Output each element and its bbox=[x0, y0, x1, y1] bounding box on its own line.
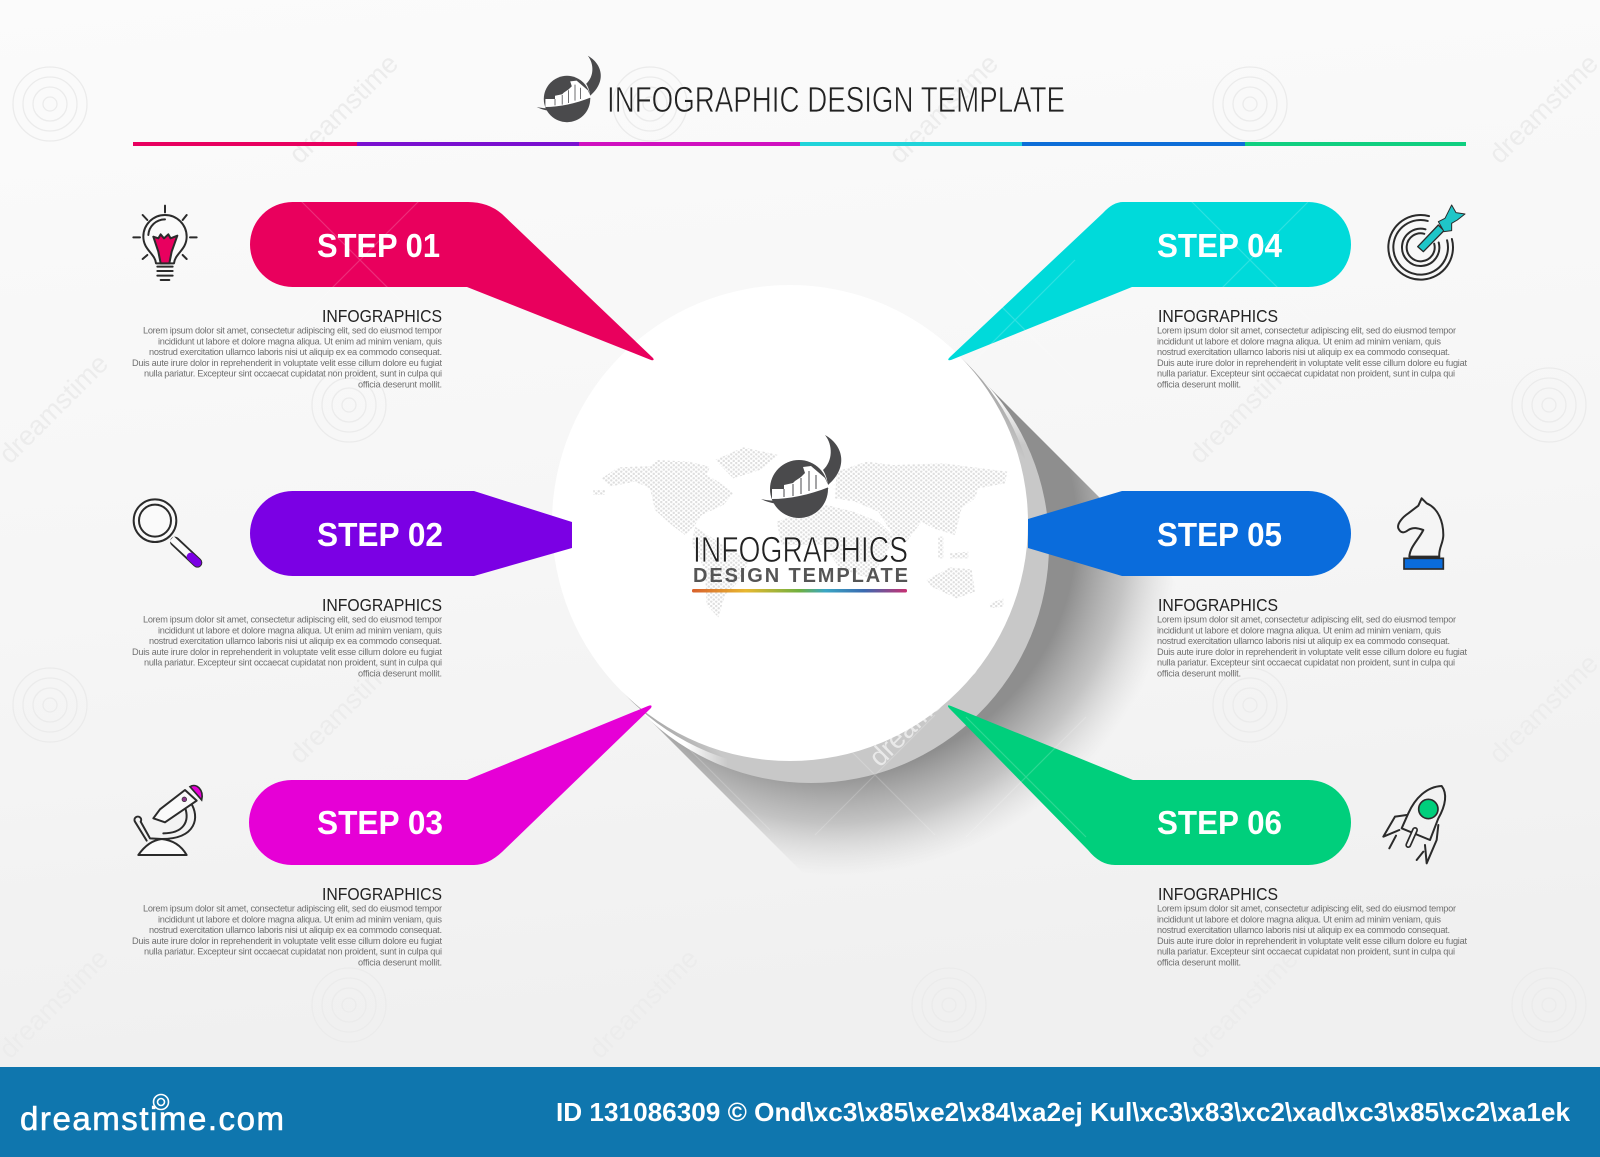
step 06 body text: Duis aute irure dolor in reprehenderit in voluptate velit esse cillum dolore eu fugiat bbox=[1157, 936, 1467, 946]
step 01 body text bbox=[132, 326, 442, 390]
icon: light bulb bbox=[133, 206, 197, 280]
panel: step 06 bbox=[948, 705, 1467, 968]
step 06 body text: nulla pariatur. Excepteur sint occaecat cupidatat non proident, sunt in culpa qui bbox=[1157, 947, 1455, 957]
watermark: spirals and diagonal text: dreamstime bbox=[583, 943, 704, 1064]
step 04 body text: nulla pariatur. Excepteur sint occaecat cupidatat non proident, sunt in culpa qui bbox=[1157, 369, 1455, 379]
step 06 heading: INFOGRAPHICS bbox=[1158, 884, 1278, 904]
step 02 body text: officia deserunt mollit. bbox=[358, 668, 442, 678]
step 03 heading: INFOGRAPHICS bbox=[322, 884, 442, 904]
step 05 heading: INFOGRAPHICS bbox=[1158, 595, 1278, 615]
step 04 body text: Lorem ipsum dolor sit amet, consectetur adipiscing elit, sed do eiusmod tempor bbox=[1157, 326, 1456, 336]
step 02 body text: Lorem ipsum dolor sit amet, consectetur adipiscing elit, sed do eiusmod tempor bbox=[143, 614, 442, 624]
step 04 heading: INFOGRAPHICS bbox=[1158, 306, 1278, 326]
step 01 body text: nulla pariatur. Excepteur sint occaecat cupidatat non proident, sunt in culpa qui bbox=[144, 369, 442, 379]
panel: step 01 bbox=[132, 202, 654, 390]
icon: magnifying glass bbox=[134, 499, 197, 563]
step 05 body text: officia deserunt mollit. bbox=[1157, 668, 1241, 678]
watermark text across the disc: dreamstime bbox=[863, 651, 984, 772]
watermark: spirals and diagonal text: dreamstime bbox=[283, 648, 404, 769]
step 01 body text: Lorem ipsum dolor sit amet, consectetur adipiscing elit, sed do eiusmod tempor bbox=[143, 326, 442, 336]
watermark: spirals and diagonal text: dreamstime bbox=[883, 48, 1004, 169]
step 06 body text: Lorem ipsum dolor sit amet, consectetur adipiscing elit, sed do eiusmod tempor bbox=[1157, 904, 1456, 914]
step 01 label: STEP 01 bbox=[317, 227, 440, 264]
step 01 body text: officia deserunt mollit. bbox=[358, 380, 442, 390]
header title: INFOGRAPHIC DESIGN TEMPLATE bbox=[607, 79, 1065, 120]
footer brand: dreamstime.com bbox=[20, 1100, 284, 1137]
step 04 body text bbox=[1157, 326, 1467, 390]
central white disc bbox=[552, 285, 1028, 761]
step 03 body text: Lorem ipsum dolor sit amet, consectetur adipiscing elit, sed do eiusmod tempor bbox=[143, 904, 442, 914]
step 06 body text bbox=[1157, 904, 1467, 968]
step 06 body text: incididunt ut labore et dolore magna aliqua. Ut enim ad minim veniam, quis bbox=[1157, 914, 1441, 924]
arrow pill 02 bbox=[250, 491, 572, 576]
step 03 body text: incididunt ut labore et dolore magna aliqua. Ut enim ad minim veniam, quis bbox=[158, 914, 442, 924]
arrow pill 06 bbox=[948, 705, 1351, 865]
step 04 body text: nostrud exercitation ullamco laboris nisi ut aliquip ex ea commodo consequat. bbox=[1157, 347, 1450, 357]
step 05 body text: nulla pariatur. Excepteur sint occaecat cupidatat non proident, sunt in culpa qui bbox=[1157, 658, 1455, 668]
arrow pill 05 bbox=[1028, 491, 1351, 576]
watermark: spirals and diagonal text: dreamstime bbox=[1183, 348, 1304, 469]
step 06 body text: officia deserunt mollit. bbox=[1157, 958, 1241, 968]
icon: rocket bbox=[1383, 786, 1445, 863]
header rainbow divider bbox=[133, 142, 1466, 146]
arrow pill 03 bbox=[249, 705, 652, 865]
central rainbow underline bbox=[692, 589, 907, 592]
step 03 body text bbox=[132, 904, 442, 968]
panel: step 04 bbox=[948, 202, 1467, 390]
step 01 body text: nostrud exercitation ullamco laboris nisi ut aliquip ex ea commodo consequat. bbox=[149, 347, 442, 357]
step 02 heading: INFOGRAPHICS bbox=[322, 595, 442, 615]
step 04 label: STEP 04 bbox=[1157, 227, 1283, 264]
watermark: spirals and diagonal text: dreamstime bbox=[283, 48, 404, 169]
icon: chess knight bbox=[1398, 498, 1443, 569]
step 02 body text: incididunt ut labore et dolore magna aliqua. Ut enim ad minim veniam, quis bbox=[158, 625, 442, 635]
central logo bbox=[761, 435, 841, 518]
step 05 body text: Lorem ipsum dolor sit amet, consectetur adipiscing elit, sed do eiusmod tempor bbox=[1157, 614, 1456, 624]
icon: target with arrow bbox=[1388, 205, 1465, 280]
watermark: spirals and diagonal text: dreamstime bbox=[1183, 943, 1304, 1064]
central subtitle: DESIGN TEMPLATE bbox=[693, 565, 908, 587]
step 04 body text: incididunt ut labore et dolore magna aliqua. Ut enim ad minim veniam, quis bbox=[1157, 336, 1441, 346]
step 02 body text: nostrud exercitation ullamco laboris nisi ut aliquip ex ea commodo consequat. bbox=[149, 636, 442, 646]
back disc bbox=[625, 358, 1049, 783]
central title: INFOGRAPHICS bbox=[693, 529, 908, 570]
step 01 body text: incididunt ut labore et dolore magna aliqua. Ut enim ad minim veniam, quis bbox=[158, 336, 442, 346]
step 05 body text: incididunt ut labore et dolore magna aliqua. Ut enim ad minim veniam, quis bbox=[1157, 625, 1441, 635]
panel: step 02 bbox=[132, 491, 572, 678]
step 03 body text: Duis aute irure dolor in reprehenderit in voluptate velit esse cillum dolore eu fugiat bbox=[132, 936, 442, 946]
arrow pill 04 bbox=[948, 202, 1351, 360]
step 06 label: STEP 06 bbox=[1157, 804, 1282, 841]
footer bar bbox=[0, 1067, 1600, 1157]
step 05 body text: nostrud exercitation ullamco laboris nisi ut aliquip ex ea commodo consequat. bbox=[1157, 636, 1450, 646]
header logo bbox=[537, 56, 601, 122]
panel: step 05 bbox=[1028, 491, 1467, 678]
step 02 body text: nulla pariatur. Excepteur sint occaecat cupidatat non proident, sunt in culpa qui bbox=[144, 658, 442, 668]
step 02 body text: Duis aute irure dolor in reprehenderit in voluptate velit esse cillum dolore eu fugiat bbox=[132, 647, 442, 657]
footer credit: ID 131086309 © Ond\xc3\x85\xe2\x84\xa2ej Kul\xc3\x83\xc2\xad\xc3\x85\xc2\xa1ek bbox=[556, 1097, 1571, 1127]
step 01 body text: Duis aute irure dolor in reprehenderit in voluptate velit esse cillum dolore eu fugiat bbox=[132, 358, 442, 368]
dotted world map bbox=[593, 447, 1007, 617]
watermark: white cross lines over shapes bbox=[300, 200, 1310, 837]
step 05 label: STEP 05 bbox=[1157, 516, 1282, 553]
panel: step 03 bbox=[132, 705, 652, 968]
step 02 body text bbox=[132, 614, 442, 678]
step 03 body text: nostrud exercitation ullamco laboris nisi ut aliquip ex ea commodo consequat. bbox=[149, 925, 442, 935]
step 04 body text: Duis aute irure dolor in reprehenderit in voluptate velit esse cillum dolore eu fugiat bbox=[1157, 358, 1467, 368]
icon: microscope bbox=[134, 786, 202, 855]
step 03 label: STEP 03 bbox=[317, 804, 443, 841]
arrow pill 01 bbox=[250, 202, 654, 360]
step 03 body text: officia deserunt mollit. bbox=[358, 958, 442, 968]
footer spiral icon bbox=[154, 1094, 168, 1110]
step 04 body text: officia deserunt mollit. bbox=[1157, 380, 1241, 390]
step 03 body text: nulla pariatur. Excepteur sint occaecat cupidatat non proident, sunt in culpa qui bbox=[144, 947, 442, 957]
step 06 body text: nostrud exercitation ullamco laboris nisi ut aliquip ex ea commodo consequat. bbox=[1157, 925, 1450, 935]
long shadow of the central disc bbox=[643, 377, 1209, 943]
step 02 label: STEP 02 bbox=[317, 516, 443, 553]
step 05 body text bbox=[1157, 614, 1467, 678]
step 01 heading: INFOGRAPHICS bbox=[322, 306, 442, 326]
step 05 body text: Duis aute irure dolor in reprehenderit in voluptate velit esse cillum dolore eu fugiat bbox=[1157, 647, 1467, 657]
